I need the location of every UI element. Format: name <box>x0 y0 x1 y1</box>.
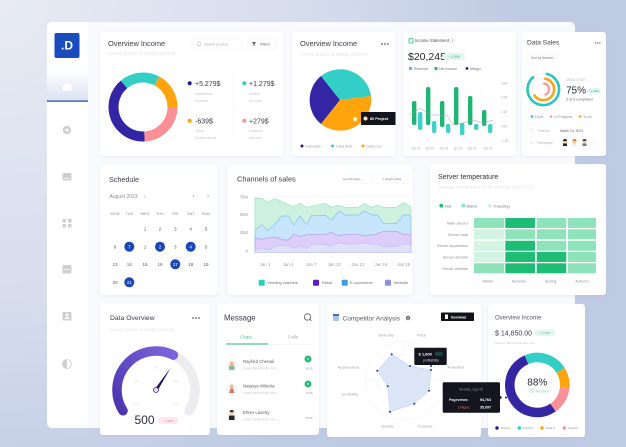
gauge scale: 500 <box>173 402 178 406</box>
stat: total expenditure: -639$ <box>195 118 213 125</box>
y axis: 2.00 <box>501 96 507 100</box>
stat: passive income: +279$ <box>249 118 269 125</box>
heatmap <box>474 218 596 273</box>
x axis: Q2 01 <box>412 146 421 150</box>
weekdays: WED <box>140 211 150 216</box>
tabs <box>226 334 312 344</box>
legend: Warm <box>466 204 478 208</box>
legend: Retail <box>322 280 332 285</box>
chart caption: Data chart <box>566 77 587 82</box>
x axis: Jan 16 <box>375 262 388 267</box>
stat: passive income: Income <box>249 135 263 140</box>
x axis: Q4 21 <box>440 146 449 150</box>
stat: active income: Active <box>249 91 261 96</box>
calendar days: 7 <box>128 244 131 249</box>
stat: active income: Income <box>249 98 263 103</box>
tooltip: pageviews: 94,764 <box>480 398 491 402</box>
stat: total expenditure: Expenditure <box>195 135 217 140</box>
candlestick bars <box>410 87 493 135</box>
calendar days: 2 <box>159 226 162 232</box>
row labels: Server data <box>448 232 469 237</box>
legend <box>259 280 409 286</box>
chat: Natasya: Lorem ipsum dolor sit a ... <box>243 391 280 395</box>
search box <box>192 38 242 49</box>
amount: $20,245 <box>408 51 446 63</box>
legend: Vending machine <box>267 280 299 285</box>
stacked area chart <box>255 197 411 253</box>
gauge scale: 400 <box>174 379 179 383</box>
calendar days: 13 <box>112 262 118 267</box>
download button <box>441 312 474 321</box>
search box: Search product <box>204 42 228 46</box>
month label: August 2023 <box>110 194 138 200</box>
weekdays: FRI <box>172 211 178 216</box>
center value: 88% <box>527 378 547 388</box>
stat: active income <box>242 81 275 103</box>
column labels: Winter <box>482 278 494 284</box>
radar axis labels: Quality <box>381 424 393 428</box>
tooltip: pageviews: 35,097 <box>480 406 491 410</box>
legend: To do <box>583 115 592 119</box>
calendar days: 2 <box>159 244 162 249</box>
legend: Data C <box>546 426 556 430</box>
timeline row <box>530 128 583 133</box>
y axis <box>501 82 508 143</box>
timeline row: Timeline <box>537 129 550 133</box>
heading: Overview Income <box>300 39 357 48</box>
completed note: 3 of 5 completed <box>566 98 593 102</box>
radar chart <box>365 342 443 420</box>
legend: Margin <box>470 67 481 71</box>
panel: overview income donut <box>488 304 585 437</box>
gauge <box>117 351 195 411</box>
legend <box>300 144 382 148</box>
weekdays: SAT <box>187 211 195 216</box>
tabs: Chats <box>240 334 253 340</box>
legend: Data B <box>523 426 532 430</box>
panel: overview income <box>100 32 283 156</box>
export button <box>377 175 410 183</box>
y axis: 3.00 <box>501 82 507 86</box>
stat: active income: +1.279$ <box>249 81 275 88</box>
tooltip: profitability: profitability <box>423 358 439 362</box>
gauge scale: 200 <box>134 379 139 383</box>
percent pill: ↑ 1.29% <box>589 89 600 93</box>
sidebar <box>47 22 88 428</box>
panel: channels of sales <box>228 165 412 295</box>
chat: Elmer: Elmer Laverty <box>243 410 270 415</box>
y axis: 1.00 <box>501 110 507 114</box>
gauge value: 500 <box>134 413 155 427</box>
timeline row: March 24, 2024 <box>560 129 583 133</box>
gauge scale: 100 <box>134 402 139 406</box>
gauge scale <box>134 366 179 406</box>
calendar days: 21 <box>127 280 132 285</box>
tooltip: profitability <box>414 348 447 365</box>
icon: inbox <box>62 265 72 274</box>
stat: total expenditure: Total <box>195 128 204 133</box>
chat: Natasya: 8 <box>307 382 309 386</box>
stat: passive income <box>242 118 269 140</box>
calendar days: 15 <box>142 262 148 267</box>
menu dots <box>595 42 601 44</box>
x axis: Q3 01 <box>426 146 435 150</box>
column labels <box>482 278 589 284</box>
chat: Rayford: 8 <box>307 357 309 361</box>
gauge scale: 300 <box>154 366 159 370</box>
icon: user <box>62 312 72 320</box>
x axis: Q2 22 <box>468 146 477 150</box>
subtitle: Average temperature (°F)in seasons 2012-2015 <box>438 184 534 190</box>
stat: additional income <box>188 81 221 103</box>
legend <box>440 204 510 208</box>
panel: data overview <box>100 304 210 435</box>
calendar days: 16 <box>157 262 163 267</box>
column labels: Autumn <box>575 278 589 284</box>
filters button: Filters <box>260 42 270 46</box>
weekdays: SUN <box>202 211 210 216</box>
tabs: Calls <box>288 334 299 340</box>
logo: .D <box>61 38 73 52</box>
percentage: 75% <box>566 86 586 96</box>
weekdays <box>110 211 210 216</box>
x axis: Jan 19 <box>397 262 411 267</box>
x axis: Jan 13 <box>351 262 365 267</box>
x axis <box>260 262 411 267</box>
panel: overview income pie <box>292 32 396 156</box>
chat: Rayford: 16:25 <box>306 367 313 371</box>
tooltip: profitability: $ 1,600 <box>418 352 433 356</box>
legend: Hot <box>445 204 452 208</box>
weekdays: THU <box>156 211 164 216</box>
calendar days: 6 <box>114 244 117 249</box>
tooltip: 80 Project <box>370 117 389 121</box>
y axis: 75M <box>240 194 248 200</box>
panel: schedule <box>100 165 217 295</box>
y axis: 0.00 <box>501 124 507 128</box>
calendar days: 1 <box>144 226 147 232</box>
amount: $ 14,850.00 <box>495 330 532 338</box>
calendar days: 14 <box>127 262 132 267</box>
icon: contrast <box>62 360 72 368</box>
tooltip: pageviews <box>443 382 507 413</box>
heading: Server temperature <box>438 174 498 181</box>
column labels: Spring <box>545 278 556 284</box>
calendar days: 1 <box>144 244 147 249</box>
radar axis labels: Durability <box>342 392 358 396</box>
legend: Done <box>535 115 543 119</box>
range select: Last 30 days ⌄ <box>343 177 363 181</box>
heading: Overview Income <box>108 39 165 48</box>
calendar days: 5 <box>205 244 208 249</box>
x axis: Jan 4 <box>283 262 294 267</box>
stat: additional income: Additional <box>195 91 213 96</box>
row labels <box>437 220 469 271</box>
menu dots <box>192 317 200 319</box>
legend: Data Aaa <box>305 144 322 148</box>
chat: Rayford <box>226 356 313 372</box>
download button: Download <box>451 315 466 319</box>
icon: statement <box>409 38 413 43</box>
icon: search <box>304 314 311 321</box>
filters button <box>247 38 276 49</box>
legend: Revenue <box>414 67 428 71</box>
icon: add <box>63 126 71 134</box>
subtitle: Lorem Ipsum is simply dummy <box>110 327 175 333</box>
radar axis labels: Appearance <box>338 364 360 369</box>
subtitle: Lorem Ipsum is simply dummy <box>108 51 176 57</box>
y axis <box>240 194 249 254</box>
calendar days: 4 <box>189 226 192 232</box>
calendar days: 20 <box>112 280 118 285</box>
row labels: Server domain <box>443 254 468 260</box>
legend: Data Ccc <box>366 144 382 148</box>
legend: Data Bbb <box>336 144 352 148</box>
legend <box>495 426 578 430</box>
change pill: ↑ 1.29% <box>540 331 551 335</box>
calendar days: 17 <box>173 262 178 267</box>
legend: Data D <box>568 426 578 430</box>
dashboard panel <box>47 22 575 428</box>
x axis: Jan 10 <box>328 262 341 267</box>
note: Recent: $51,180.00 last year <box>495 341 535 345</box>
legend: Website <box>394 280 409 285</box>
export button: ⇪ Export Data <box>382 177 402 181</box>
heading: Channels of sales <box>237 174 296 184</box>
column labels: Summer <box>512 278 527 284</box>
heading: Competitor Analysis <box>342 316 401 322</box>
panel: income statement <box>403 32 516 156</box>
legend: In Progress <box>554 115 573 119</box>
stat: additional income: +5.279$ <box>195 81 221 88</box>
sort select: Sort by Newest ⌄ <box>531 56 556 60</box>
heading: Message <box>224 314 256 322</box>
row labels: Server application <box>437 243 468 248</box>
panel: server temperature <box>430 164 606 295</box>
chart grid <box>409 80 495 143</box>
chat: Natasya <box>226 380 313 395</box>
calendar days: 4 <box>189 244 192 249</box>
radar axis labels <box>338 332 465 428</box>
donut chart <box>101 65 185 149</box>
month label <box>110 194 209 200</box>
calendar days <box>112 226 209 285</box>
radar axis labels: Channel <box>418 424 433 428</box>
heading: Data Sales <box>527 40 560 46</box>
pie chart <box>310 69 371 131</box>
calendar days: 3 <box>174 244 177 249</box>
month label: ‹ <box>192 194 194 200</box>
donut chart <box>499 347 576 423</box>
chat: Rayford: Lorem ipsum dolor sit a ... <box>243 367 280 371</box>
x axis <box>412 146 493 150</box>
logo <box>54 33 80 58</box>
heading: Schedule <box>109 175 139 184</box>
month label: › <box>144 194 146 200</box>
stat: passive income: Passive <box>249 128 264 133</box>
needle <box>154 368 171 392</box>
x axis: Jan 7 <box>306 262 317 267</box>
calendar days: 18 <box>188 262 194 267</box>
panel: data sales <box>522 32 606 156</box>
dividers <box>186 70 277 147</box>
radar axis labels: Advertise <box>448 364 465 369</box>
legend: E-commerce <box>350 280 373 285</box>
change pill: ↑ 1.29% <box>448 55 460 59</box>
range select <box>338 175 372 183</box>
ring chart <box>525 71 562 108</box>
legend: Data A <box>501 426 510 430</box>
stat: additional income: Income <box>195 98 209 103</box>
icon: image <box>62 173 72 180</box>
subtitle: Lorem Ipsum is simply dummy <box>300 52 368 58</box>
y axis: -1.00 <box>501 139 508 143</box>
calendar days: 5 <box>205 226 208 232</box>
x axis: Q3 22 <box>484 146 493 150</box>
y axis: 50M <box>240 212 248 217</box>
tooltip: pageviews: Monday, Sep 05 <box>459 388 483 392</box>
selected days <box>124 242 196 287</box>
icon: info <box>406 316 410 320</box>
x axis: Q1 22 <box>454 146 463 150</box>
panel: message <box>217 304 319 435</box>
weekdays: TUE <box>125 211 134 216</box>
month label: › <box>207 194 209 200</box>
weekdays: MON <box>110 211 120 216</box>
y axis: 0 <box>246 248 249 254</box>
legend: Net income <box>439 67 457 71</box>
chat: Natasya: 14:45 <box>306 391 313 395</box>
row labels: Server website <box>442 266 468 271</box>
legend: Freezing <box>494 204 510 208</box>
panel: competitor analysis <box>327 304 481 437</box>
tooltip: pageviews: Pageviews: <box>449 398 469 402</box>
chat: Rayford: Rayford Chenail <box>243 359 274 364</box>
y axis: 25M <box>240 230 248 235</box>
chat: Elmer <box>226 409 313 422</box>
icon: grid <box>62 219 72 228</box>
row labels: Main Server <box>447 220 469 226</box>
active home tab <box>47 70 88 102</box>
heading: Income Statement ⓘ <box>415 37 455 44</box>
legend <box>531 115 592 119</box>
heading: Overview Income <box>495 316 542 322</box>
radar axis labels: Price <box>417 332 427 338</box>
radar axis labels: Diversity <box>378 332 394 338</box>
x axis: Jan 1 <box>260 262 271 267</box>
participant row: Participant <box>537 141 553 145</box>
icon: store <box>333 314 339 321</box>
chat: Elmer: 15:36 <box>306 416 313 420</box>
menu dots <box>381 43 389 45</box>
legend <box>409 67 481 71</box>
change pill: ↓ 1.29% <box>163 419 174 423</box>
tooltip: pageviews: Unique: <box>458 406 470 410</box>
heading: Data Overview <box>110 315 155 322</box>
chat: Elmer: Lorem ipsum dolor sit a ... <box>243 418 280 422</box>
reached badge: Reached <box>536 389 549 393</box>
stat: total expenditure <box>188 118 217 140</box>
chat: Natasya: Natasya Wilodra <box>243 384 275 388</box>
calendar days: 19 <box>203 262 209 267</box>
calendar days: 3 <box>174 226 177 232</box>
